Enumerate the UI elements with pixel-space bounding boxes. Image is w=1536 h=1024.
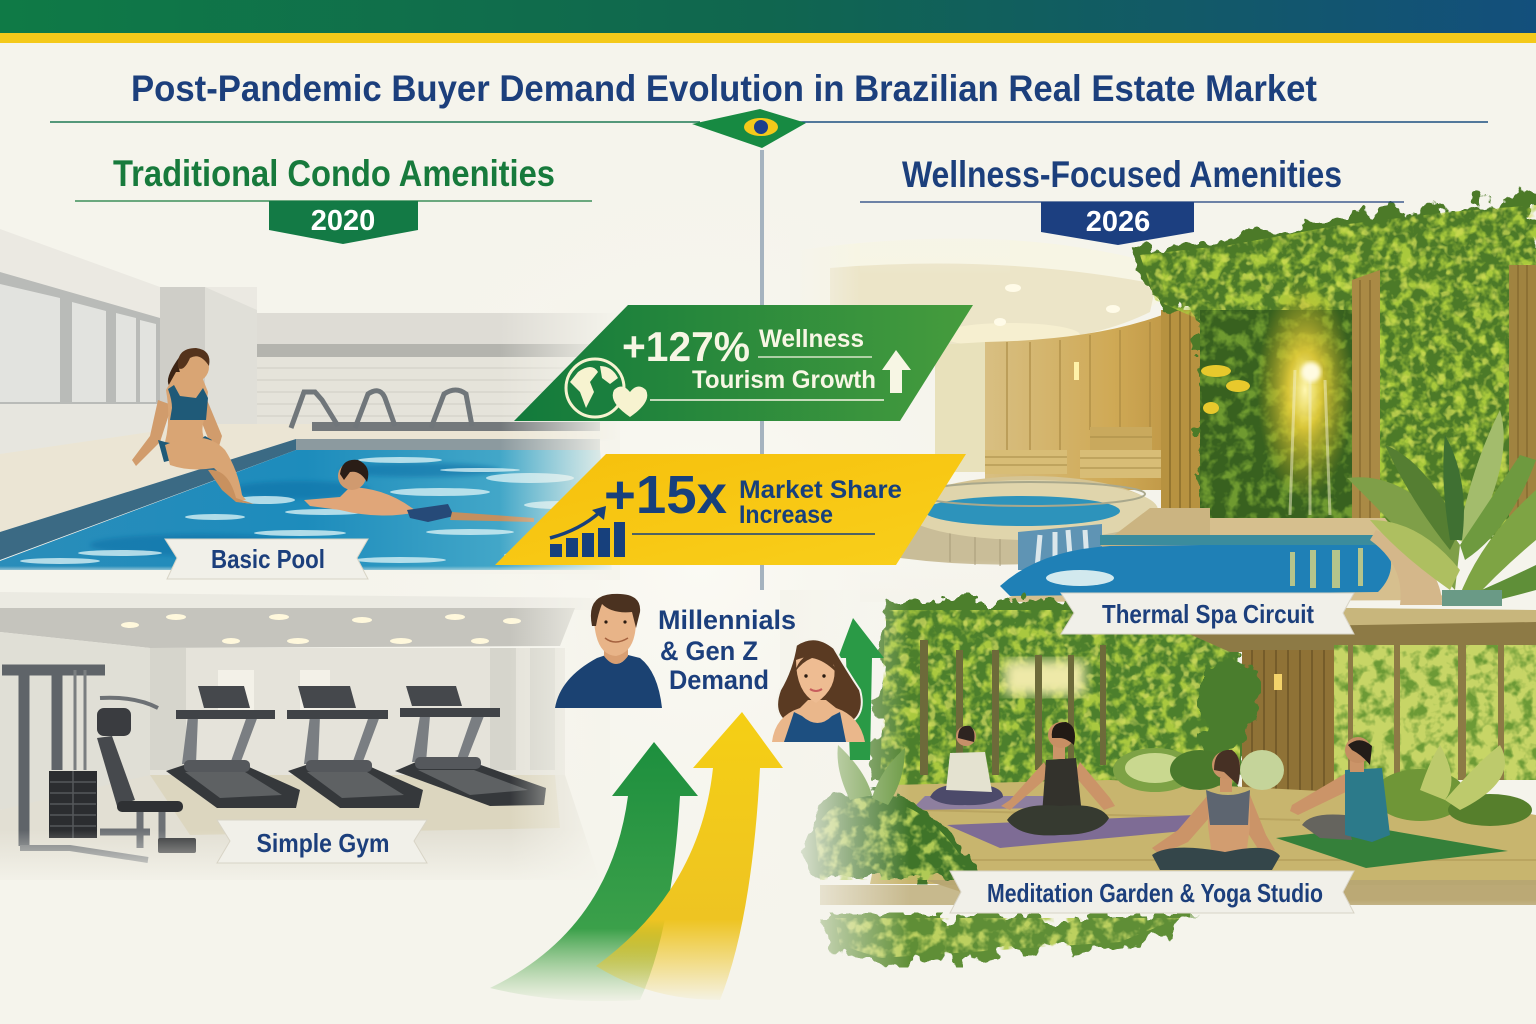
stat banner: market share: Increase <box>739 501 833 529</box>
top banner <box>0 0 1536 43</box>
stat banner: market share: Market Share <box>739 476 902 504</box>
label: simple gym: Simple Gym <box>256 828 390 858</box>
window garden <box>1334 645 1536 780</box>
label: meditation garden <box>950 871 1354 913</box>
icon: young man <box>555 594 662 708</box>
label: basic pool: Basic Pool <box>211 544 325 574</box>
ceiling <box>800 238 1160 345</box>
icon: young woman <box>772 639 865 742</box>
icon: treadmill 2 <box>287 686 423 808</box>
heading: traditional: 2020 <box>311 205 375 237</box>
figure: seated yoga 2 <box>1001 722 1115 835</box>
heading: traditional: Traditional Condo Amenities <box>113 153 555 194</box>
stat banner: wellness tourism: +127% <box>622 323 750 370</box>
heading: wellness: 2026 <box>1086 206 1150 238</box>
centre divider <box>760 150 764 590</box>
title rule with Brazil flag <box>50 109 1488 148</box>
vertical garden <box>1133 195 1536 540</box>
stat banner: market share <box>495 454 966 565</box>
icon: up arrow <box>882 350 911 393</box>
timber wall <box>1242 650 1334 792</box>
heading: wellness: Wellness-Focused Amenities <box>902 154 1342 195</box>
scene: meditation garden <box>780 590 1536 970</box>
figure: woman at pool edge <box>132 348 254 504</box>
label: meditation garden: Meditation Garden & Yoga Studio <box>987 878 1323 908</box>
title: Post-Pandemic Buyer Demand Evolution in Brazilian Real Estate Market <box>131 68 1317 109</box>
mat: lilac back <box>911 796 1047 810</box>
icon: globe and heart <box>566 359 647 417</box>
icon: growth bars <box>550 506 625 557</box>
stat banner: wellness tourism <box>514 305 973 421</box>
stat banner: market share: +15x <box>604 465 727 525</box>
deck and tub <box>1000 518 1445 602</box>
label: basic pool <box>165 539 368 579</box>
mat: green <box>1276 827 1508 868</box>
arrow: large yellow growth <box>596 712 783 1000</box>
icon: tropical plants <box>1347 410 1536 605</box>
floor <box>870 780 1536 884</box>
figure: swimmer <box>304 460 534 522</box>
arrow: large green growth <box>490 742 698 1001</box>
garden shrubs: foreground left <box>805 745 985 880</box>
figure: seated yoga 3 <box>1152 750 1280 870</box>
figure: seated yoga 4 <box>1290 737 1390 842</box>
scene: basic pool <box>0 229 620 580</box>
icon: weight machine <box>2 666 196 860</box>
foliage under the step <box>825 915 1200 965</box>
demand label: Demand <box>669 665 769 695</box>
figure: seated yoga 1 <box>930 726 1003 805</box>
arrow: small green <box>838 618 884 760</box>
label: thermal spa <box>1061 593 1354 634</box>
heading: wellness <box>860 154 1404 245</box>
stat banner: wellness tourism: Wellness <box>759 325 864 353</box>
icon: treadmill 3 <box>395 686 546 806</box>
demand label: & Gen Z <box>660 636 758 666</box>
stat banner: wellness tourism: Tourism Growth <box>692 366 876 394</box>
icon: treadmill 1 <box>166 686 300 808</box>
label: thermal spa: Thermal Spa Circuit <box>1102 599 1314 629</box>
mat: purple <box>947 815 1195 848</box>
pavilion roof <box>1180 612 1536 652</box>
demand label: Millennials <box>658 605 796 635</box>
scene: thermal spa circuit <box>790 195 1536 606</box>
shrubs: back <box>1113 745 1532 826</box>
icon: pool ladders <box>291 390 472 428</box>
label: simple gym <box>217 820 427 863</box>
heading: traditional <box>75 153 592 244</box>
background foliage <box>870 600 1240 790</box>
scene: simple gym <box>0 592 620 888</box>
